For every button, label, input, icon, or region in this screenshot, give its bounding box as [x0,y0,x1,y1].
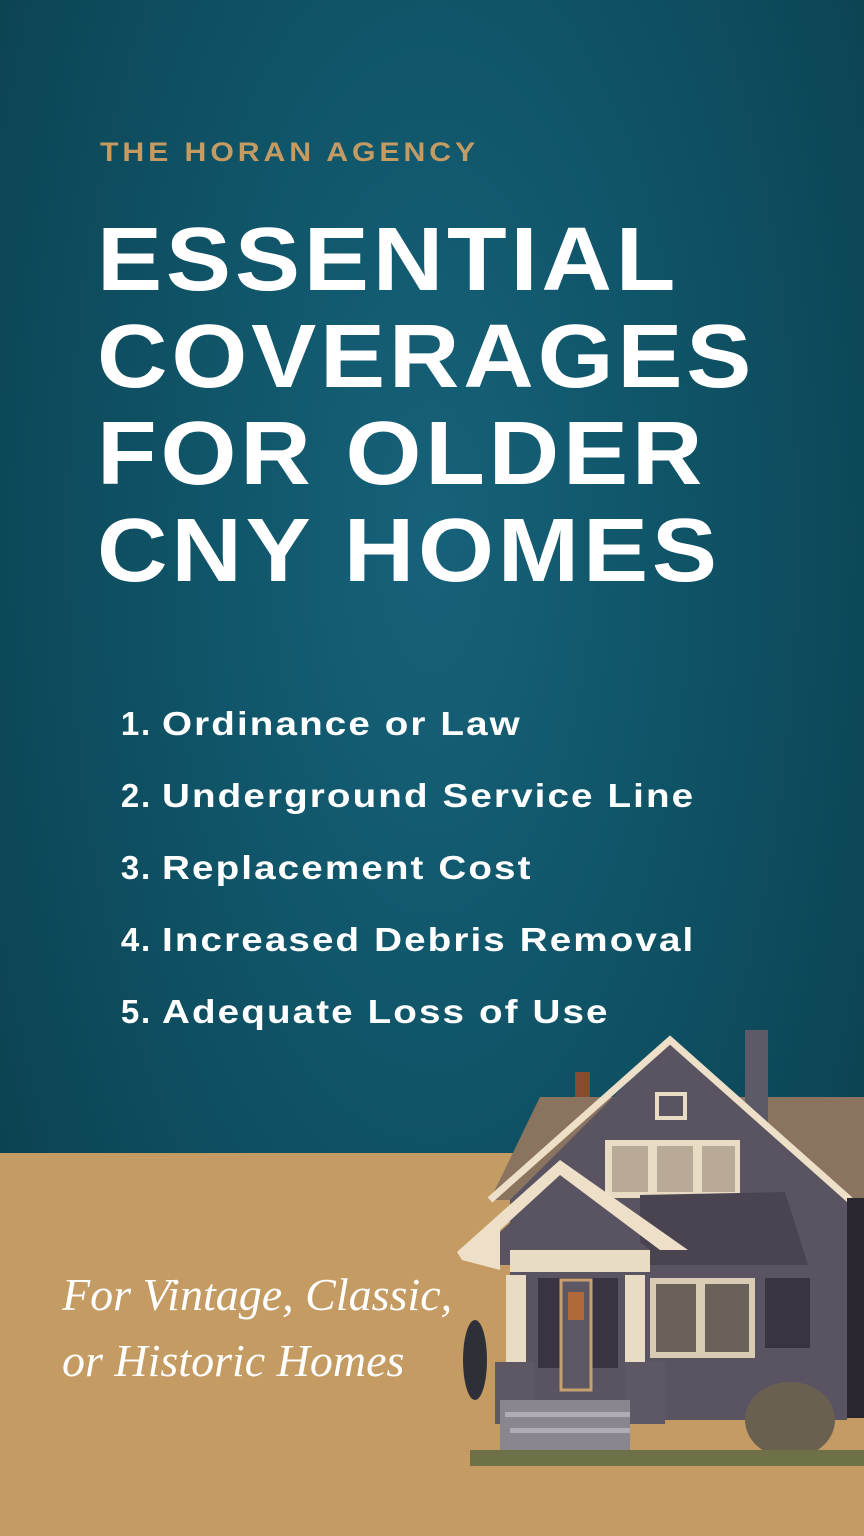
item 5: 5. [121,993,152,1030]
coverage list [121,705,695,1030]
item 4: Increased Debris Removal [162,921,695,958]
script tagline: For Vintage, Classic, [62,1269,452,1320]
script tagline: or Historic Homes [62,1335,404,1386]
item 2: 2. [121,777,152,814]
script tagline [62,1269,452,1386]
title: COVERAGES [97,307,755,407]
title: ESSENTIAL [97,210,679,310]
item 1: Ordinance or Law [162,705,522,742]
item 5: Adequate Loss of Use [162,993,610,1030]
title [97,210,755,601]
title: FOR OLDER [97,404,706,504]
item 3: 3. [121,849,152,886]
brand name: THE HORAN AGENCY [100,137,479,167]
item 3: Replacement Cost [162,849,533,886]
item 1: 1. [121,705,152,742]
item 4: 4. [121,921,152,958]
title: CNY HOMES [97,501,721,601]
gold band [0,1153,864,1536]
item 2: Underground Service Line [162,777,695,814]
